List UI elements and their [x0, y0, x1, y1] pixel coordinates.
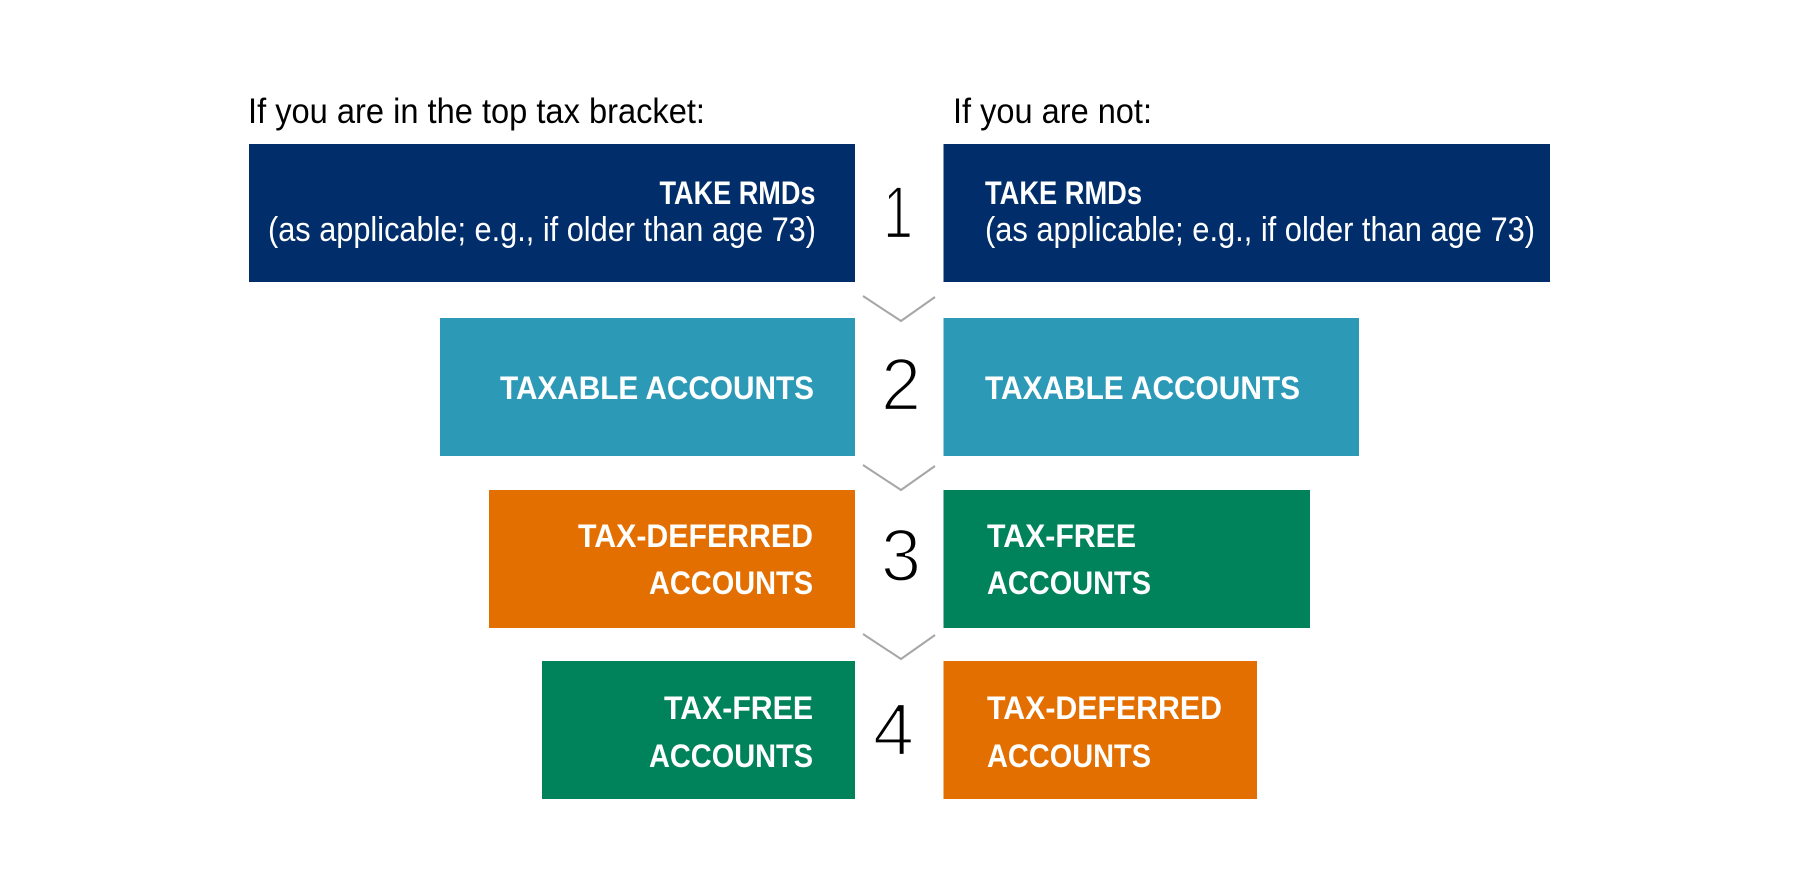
panel: step 3 left, tax-deferred accounts: TAX-DEFERRED: [578, 518, 813, 554]
panel: step 1 right, take RMDs: TAKE RMDs: [985, 175, 1142, 211]
step number 1: 1: [883, 171, 913, 254]
panel: step 4 left, tax-free accounts: [542, 661, 855, 799]
panel: step 1 left, take RMDs: (as applicable; e.g., if older than age 73): [268, 211, 816, 249]
panel: step 1 left, take RMDs: TAKE RMDs: [660, 175, 816, 211]
step number 3: 3: [881, 514, 921, 597]
panel: step 4 right, tax-deferred accounts: TAX-DEFERRED: [987, 690, 1222, 726]
panel: step 3 left, tax-deferred accounts: [489, 490, 855, 628]
step number 4: 4: [873, 688, 914, 771]
arrow: chevron from step 3 to 4: [863, 634, 935, 659]
panel: step 2 left, taxable accounts: TAXABLE ACCOUNTS: [500, 370, 814, 406]
panel: step 1 right, take RMDs: (as applicable; e.g., if older than age 73): [985, 211, 1535, 249]
heading: top tax bracket column: If you are in the top tax bracket:: [248, 92, 705, 131]
panel: step 4 left, tax-free accounts: TAX-FREE: [664, 690, 813, 726]
panel: step 2 left, taxable accounts: [440, 318, 855, 456]
panel: step 1 left, take RMDs: [249, 144, 855, 282]
panel: step 4 right, tax-deferred accounts: ACCOUNTS: [987, 738, 1151, 774]
panel: step 3 left, tax-deferred accounts: ACCOUNTS: [649, 565, 813, 601]
panel: step 2 right, taxable accounts: TAXABLE ACCOUNTS: [985, 370, 1300, 406]
panel: step 1 right, take RMDs: [944, 144, 1550, 282]
panel: step 3 right, tax-free accounts: TAX-FREE: [987, 518, 1136, 554]
arrow: chevron from step 2 to 3: [863, 465, 935, 490]
heading: not top bracket column: If you are not:: [953, 92, 1152, 131]
panel: step 4 left, tax-free accounts: ACCOUNTS: [649, 738, 813, 774]
panel: step 4 right, tax-deferred accounts: [944, 661, 1257, 799]
panel: step 2 right, taxable accounts: [944, 318, 1359, 456]
panel: step 3 right, tax-free accounts: [944, 490, 1310, 628]
panel: step 3 right, tax-free accounts: ACCOUNTS: [987, 565, 1151, 601]
arrow: chevron from step 1 to 2: [863, 296, 935, 321]
step number 2: 2: [881, 343, 921, 426]
